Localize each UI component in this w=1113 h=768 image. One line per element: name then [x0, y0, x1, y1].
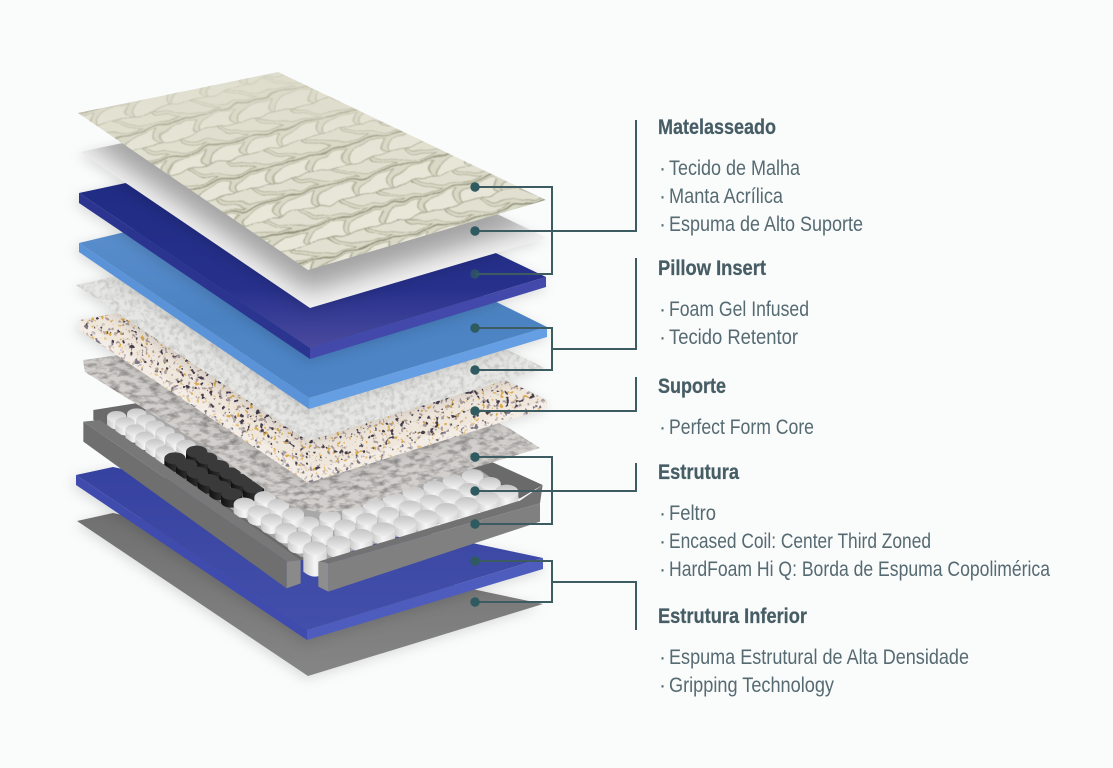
encased coils [107, 408, 518, 577]
text: Estrutura: Feltro [669, 502, 716, 525]
text: Estrutura Inferior: Estrutura Inferior [658, 605, 807, 628]
text: Estrutura: Estrutura [658, 461, 739, 484]
text: Pillow Insert: Foam Gel Infused [669, 298, 809, 321]
connector: Estrutura Inferior [470, 556, 636, 630]
connector: Suporte [470, 377, 636, 416]
mattress exploded layers [72, 72, 547, 681]
text: Pillow Insert: · [659, 298, 666, 321]
text: Estrutura [658, 461, 1050, 581]
text: Pillow Insert [658, 257, 809, 349]
text: Pillow Insert: Pillow Insert [658, 257, 766, 280]
layer: gel infused foam [79, 195, 547, 409]
layer: high support foam [79, 150, 546, 359]
text: Matelasseado: · [659, 213, 666, 236]
text: Suporte: · [659, 416, 666, 439]
text: Suporte [658, 375, 814, 439]
frame back [93, 403, 543, 562]
layer: retaining fabric [76, 240, 545, 441]
frame right rail [318, 485, 543, 563]
layer: gripping base [77, 513, 543, 676]
connector: Pillow Insert [470, 258, 636, 375]
text: Matelasseado: Espuma de Alto Suporte [669, 213, 863, 236]
layer: high density structural foam [76, 467, 543, 640]
text: Estrutura: · [659, 558, 666, 581]
text: Matelasseado: Tecido de Malha [669, 157, 800, 180]
layer: support foam [79, 280, 547, 483]
text: Estrutura: Encased Coil: Center Third Zoned [669, 530, 931, 553]
layer: coil frame and encased coils [83, 403, 543, 592]
text: Estrutura: · [659, 502, 666, 525]
text: Estrutura Inferior: Gripping Technology [669, 674, 834, 697]
text: Matelasseado: Matelasseado [658, 116, 776, 139]
text: Suporte: Perfect Form Core [669, 416, 814, 439]
text: Pillow Insert: Tecido Retentor [669, 326, 798, 349]
text: Matelasseado: Manta Acrílica [669, 185, 783, 208]
frame left rail [83, 420, 301, 562]
text: Estrutura Inferior: Espuma Estrutural de Alta Densidade [669, 646, 969, 669]
text: Estrutura: HardFoam Hi Q: Borda de Espuma Copolimérica [669, 558, 1050, 581]
text: Estrutura Inferior [658, 605, 969, 697]
connector: Estrutura [470, 452, 636, 529]
text: Estrutura Inferior: · [659, 674, 666, 697]
text: Pillow Insert: · [659, 326, 666, 349]
text: Matelasseado: · [659, 157, 666, 180]
text: Estrutura: · [659, 530, 666, 553]
layer: acrylic blanket [80, 142, 546, 310]
layer: felt [83, 330, 540, 513]
text: Suporte: Suporte [658, 375, 726, 398]
text: Matelasseado [658, 116, 863, 236]
connector: Matelasseado [470, 120, 636, 279]
text: Matelasseado: · [659, 185, 666, 208]
layer: knit fabric quilting [78, 72, 546, 270]
text: Estrutura Inferior: · [659, 646, 666, 669]
